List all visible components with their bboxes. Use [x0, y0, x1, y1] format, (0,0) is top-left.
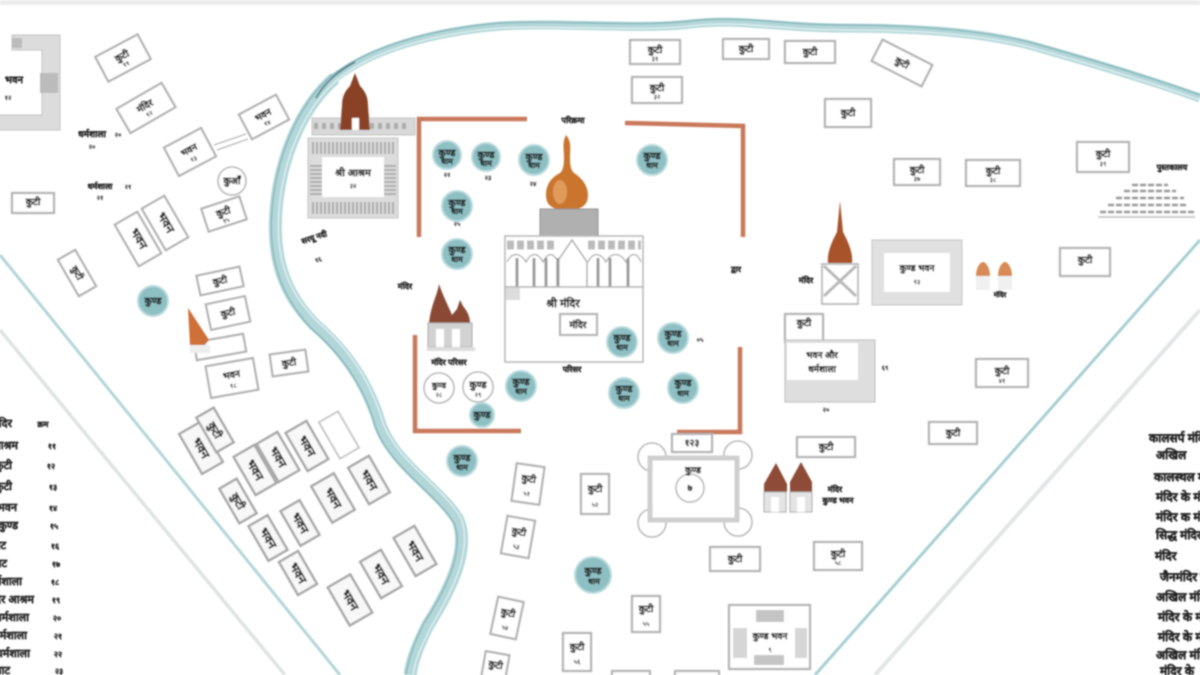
water tanks inside enclosure: २८ — [436, 392, 443, 399]
road lines: right — [815, 240, 1200, 675]
dome — [540, 135, 598, 236]
fort with corner towers — [638, 434, 752, 537]
water tanks inside enclosure: कुण्ड — [525, 152, 543, 163]
twin brown temples: कुण्ड भवन — [822, 496, 854, 506]
hatched courtyard near river — [308, 138, 398, 218]
east building block: कुटी — [796, 317, 812, 329]
buildings top row: कुटी — [649, 82, 665, 94]
buildings top row: कुटी — [994, 365, 1010, 377]
enclosure labels — [397, 115, 742, 344]
left index table: १४ — [49, 504, 57, 513]
courtyard east: १३ — [914, 279, 921, 286]
buildings top row: कुटी — [802, 46, 818, 58]
buildings upper left: कुटी — [68, 263, 86, 283]
left index table: २० — [53, 614, 61, 623]
arcade — [505, 236, 643, 287]
buildings south of temple: ५६ — [574, 659, 581, 666]
buildings upper left: कुटी — [25, 196, 41, 208]
temple courtyard — [505, 287, 643, 374]
water tanks inside enclosure: कुण्ड — [448, 245, 466, 256]
water tanks inside enclosure: २४ — [530, 181, 537, 188]
water tanks inside enclosure: २५ — [454, 221, 461, 228]
buildings south of temple: कुटी — [727, 553, 743, 565]
stepped pile with label — [1098, 163, 1195, 217]
two small domes — [976, 262, 1012, 299]
buildings upper left: १२ — [145, 109, 155, 119]
buildings upper left: कुटी — [112, 47, 132, 65]
buildings top row: कुटी — [738, 43, 754, 55]
water tanks inside enclosure: धाम — [441, 157, 454, 166]
twin brown temples — [764, 462, 854, 512]
buildings upper left: कुटी — [214, 204, 233, 220]
water tanks inside enclosure: कुण्ड — [613, 333, 631, 344]
buildings top row: ४१ — [999, 378, 1005, 385]
buildings upper left — [12, 34, 308, 398]
left index table: १८ — [51, 578, 59, 587]
buildings top row: कुटी — [985, 165, 1001, 177]
right spire temple: मंदिर — [798, 275, 814, 285]
left label text — [78, 128, 131, 202]
buildings south of temple: कुटी — [587, 483, 603, 495]
buildings upper left: भवन — [179, 141, 200, 160]
fort with corner towers: ७ — [688, 483, 693, 494]
water tanks inside enclosure: कुण्ड — [674, 378, 692, 389]
row buildings lower left: भवन — [189, 435, 213, 462]
water tanks inside enclosure: कुण्ड — [469, 380, 487, 391]
left index table: १९ — [52, 596, 60, 605]
water tanks inside enclosure — [138, 141, 698, 593]
water tanks inside enclosure: धाम — [618, 394, 631, 403]
courtyard east — [872, 240, 962, 305]
east building block: भवन और — [806, 349, 838, 360]
buildings top row: कुटी — [945, 427, 961, 439]
buildings top row: ३८ — [990, 177, 997, 184]
water tanks inside enclosure: धाम — [588, 577, 601, 586]
water tanks inside enclosure: कुण्ड — [512, 377, 530, 388]
temple courtyard: मंदिर — [568, 319, 588, 331]
river — [271, 19, 1200, 675]
row buildings lower left: भवन — [321, 485, 345, 512]
water tanks inside enclosure: धाम — [515, 387, 528, 396]
left index table: १७ — [52, 560, 61, 569]
left index table: ११ — [48, 442, 56, 451]
buildings south of temple — [481, 463, 862, 675]
buildings upper left: १३ — [189, 155, 199, 164]
water tanks inside enclosure: धाम — [480, 159, 493, 168]
right text column: अखिल — [1156, 448, 1187, 462]
row buildings lower left: भवन — [338, 587, 362, 614]
buildings upper left: कुटी — [211, 274, 229, 289]
row buildings lower left: भवन — [286, 560, 310, 587]
water tanks inside enclosure: धाम — [667, 339, 680, 348]
left index table: १६ — [51, 542, 60, 551]
buildings south of temple: ५३ — [512, 543, 521, 551]
left label text: धर्मशाला — [78, 128, 107, 139]
right text column — [1148, 431, 1200, 675]
small twin-spire temple: मंदिर परिसर — [430, 357, 467, 367]
water tanks inside enclosure: कुण्ड — [438, 148, 456, 159]
row buildings lower left: भवन — [403, 538, 427, 565]
left index table: क्रम — [37, 420, 50, 429]
buildings south of temple: ५४ — [501, 624, 509, 633]
temple enclosure walls — [415, 119, 743, 432]
water tanks inside enclosure: कुण्ड — [584, 566, 602, 577]
left label text: धर्मशाला — [88, 181, 113, 191]
hatched courtyard near river: ३४ — [350, 183, 357, 190]
left index table: १२ — [47, 462, 55, 471]
hatched courtyard near river: श्री आश्रम — [334, 166, 372, 179]
water tanks inside enclosure: धाम — [528, 161, 541, 170]
brown temple with hatched strip — [312, 73, 415, 135]
buildings top row: ३१ — [652, 56, 658, 63]
buildings upper left: कुटी — [219, 306, 237, 321]
buildings top row: ३९ — [1100, 161, 1106, 168]
buildings south of temple: कुटी — [830, 548, 846, 560]
buildings south of temple: कुटी — [569, 641, 585, 653]
buildings top row: कुटी — [892, 54, 912, 72]
buildings upper left: भवन — [222, 368, 242, 382]
buildings top row — [630, 39, 1129, 457]
river label: १६ — [314, 256, 323, 265]
row buildings lower left: भवन — [369, 561, 393, 588]
buildings upper left: भवन — [127, 226, 151, 253]
buildings upper left: कुटी — [280, 356, 298, 370]
left label text: २१ — [125, 184, 131, 191]
water tanks inside enclosure: कुण्ड — [144, 296, 162, 307]
river label — [299, 228, 336, 267]
small orange spire — [188, 308, 210, 353]
water tanks inside enclosure: कुण्ड — [473, 410, 491, 421]
left index table: १३ — [49, 483, 57, 492]
road lines: left — [0, 255, 340, 675]
water tanks inside enclosure: २२ — [444, 172, 451, 179]
fort with corner towers: कुण्ड — [684, 465, 702, 476]
buildings south of temple: कुटी — [499, 606, 517, 621]
water tanks inside enclosure: धाम — [616, 343, 629, 352]
left index table — [0, 416, 63, 675]
buildings south of temple: ५५ — [643, 621, 650, 628]
river label: सरयू नदी — [299, 228, 329, 247]
east building block: ६९ — [882, 365, 888, 372]
water tanks inside enclosure: कुण्ड — [643, 151, 661, 162]
row buildings lower left — [179, 408, 436, 626]
row buildings lower left: भवन — [256, 525, 280, 552]
buildings south of temple: ५८ — [835, 560, 842, 567]
right text column: मंदिर — [1154, 549, 1178, 563]
two small domes: मंदिर — [993, 290, 1007, 299]
water tanks inside enclosure: २९ — [475, 392, 481, 399]
water tanks inside enclosure: कुण्ड — [664, 329, 682, 340]
water tanks inside enclosure: धाम — [451, 255, 464, 264]
left index table: २१ — [54, 632, 62, 641]
buildings top row: कुटी — [840, 107, 856, 119]
water tanks inside enclosure: धाम — [677, 389, 690, 398]
buildings upper left: मंदिर — [134, 96, 156, 116]
fort building top left: भवन — [5, 75, 24, 86]
row buildings lower left: भवन — [357, 467, 381, 494]
water tanks inside enclosure: धाम — [646, 161, 659, 170]
water tanks inside enclosure: कुण्ड — [615, 384, 633, 395]
row buildings lower left: भवन — [266, 444, 290, 471]
left index table: २२ — [54, 650, 62, 659]
courtyard east: कुण्ड भवन — [899, 263, 935, 274]
buildings top row: ३७ — [914, 176, 921, 183]
row buildings lower left: भवन — [243, 457, 267, 484]
buildings south of temple: कुटी — [510, 525, 528, 539]
left label text: २० — [115, 132, 122, 139]
left label text: २१ — [97, 195, 103, 202]
water tanks inside enclosure: धाम — [456, 463, 469, 472]
main temple — [505, 135, 643, 374]
water tanks inside enclosure: २३ — [485, 175, 492, 182]
buildings upper left: १८ — [230, 382, 238, 390]
buildings top row: कुटी — [1077, 254, 1093, 266]
fort building top left: १२ — [5, 95, 12, 102]
buildings south of temple: कुटी — [486, 658, 504, 672]
row buildings lower left: भवन — [288, 510, 312, 537]
buildings top row: कुटी — [818, 441, 834, 453]
row buildings lower left: भवन — [295, 433, 319, 460]
courtyard building south-east — [729, 605, 810, 669]
temple courtyard: परिसर — [562, 364, 582, 374]
buildings south of temple: ५१ — [523, 490, 530, 498]
buildings upper left: कुआँ — [222, 175, 242, 187]
stepped pile with label: पुस्तकालय — [1156, 163, 1188, 173]
left index table: १५ — [50, 522, 58, 531]
buildings upper left: १४ — [263, 119, 273, 128]
buildings upper left: १५ — [222, 217, 231, 226]
enclosure labels: द्वार — [730, 265, 742, 274]
water tanks inside enclosure: कुण्ड — [448, 198, 466, 209]
enclosure labels: परिक्रमा — [561, 115, 585, 125]
water tanks inside enclosure: धाम — [451, 207, 464, 216]
buildings south of temple: ५२ — [592, 502, 599, 509]
buildings south of temple: कुटी — [520, 472, 537, 486]
left label text: २० — [89, 144, 96, 151]
water tanks inside enclosure: कुण्ड — [477, 150, 495, 161]
courtyard building south-east: ९ — [768, 647, 772, 654]
temple courtyard: श्री मंदिर — [545, 296, 580, 310]
enclosure labels: मंदिर — [397, 281, 413, 291]
enclosure labels: ०५ — [697, 337, 704, 344]
east building block — [785, 314, 888, 414]
buildings upper left: ११ — [122, 60, 131, 69]
buildings upper left: भवन — [253, 106, 274, 125]
courtyard building south-east: कुण्ड भवन — [752, 631, 788, 642]
buildings top row: कुटी — [909, 164, 925, 176]
row buildings lower left: कुटी — [203, 418, 226, 442]
buildings top row: कुटी — [1095, 148, 1111, 160]
east building block: धर्मशाला — [808, 363, 837, 374]
row buildings lower left: कुटी — [226, 489, 249, 513]
east building block: २० — [823, 407, 830, 414]
buildings top row: कुटी — [647, 44, 663, 56]
buildings top row: ३२ — [654, 94, 661, 101]
buildings upper left: भवन — [154, 210, 178, 237]
fort with corner towers: १२३ — [685, 438, 699, 449]
buildings south of temple: कुटी — [638, 603, 654, 615]
fort building top left — [0, 35, 60, 130]
water tanks inside enclosure: कुण्ड — [453, 453, 471, 464]
water tanks inside enclosure: कुण्ड — [431, 381, 447, 391]
right spire temple — [798, 201, 858, 304]
small twin-spire temple — [427, 284, 475, 367]
twin brown temples: मंदिर — [827, 484, 843, 494]
